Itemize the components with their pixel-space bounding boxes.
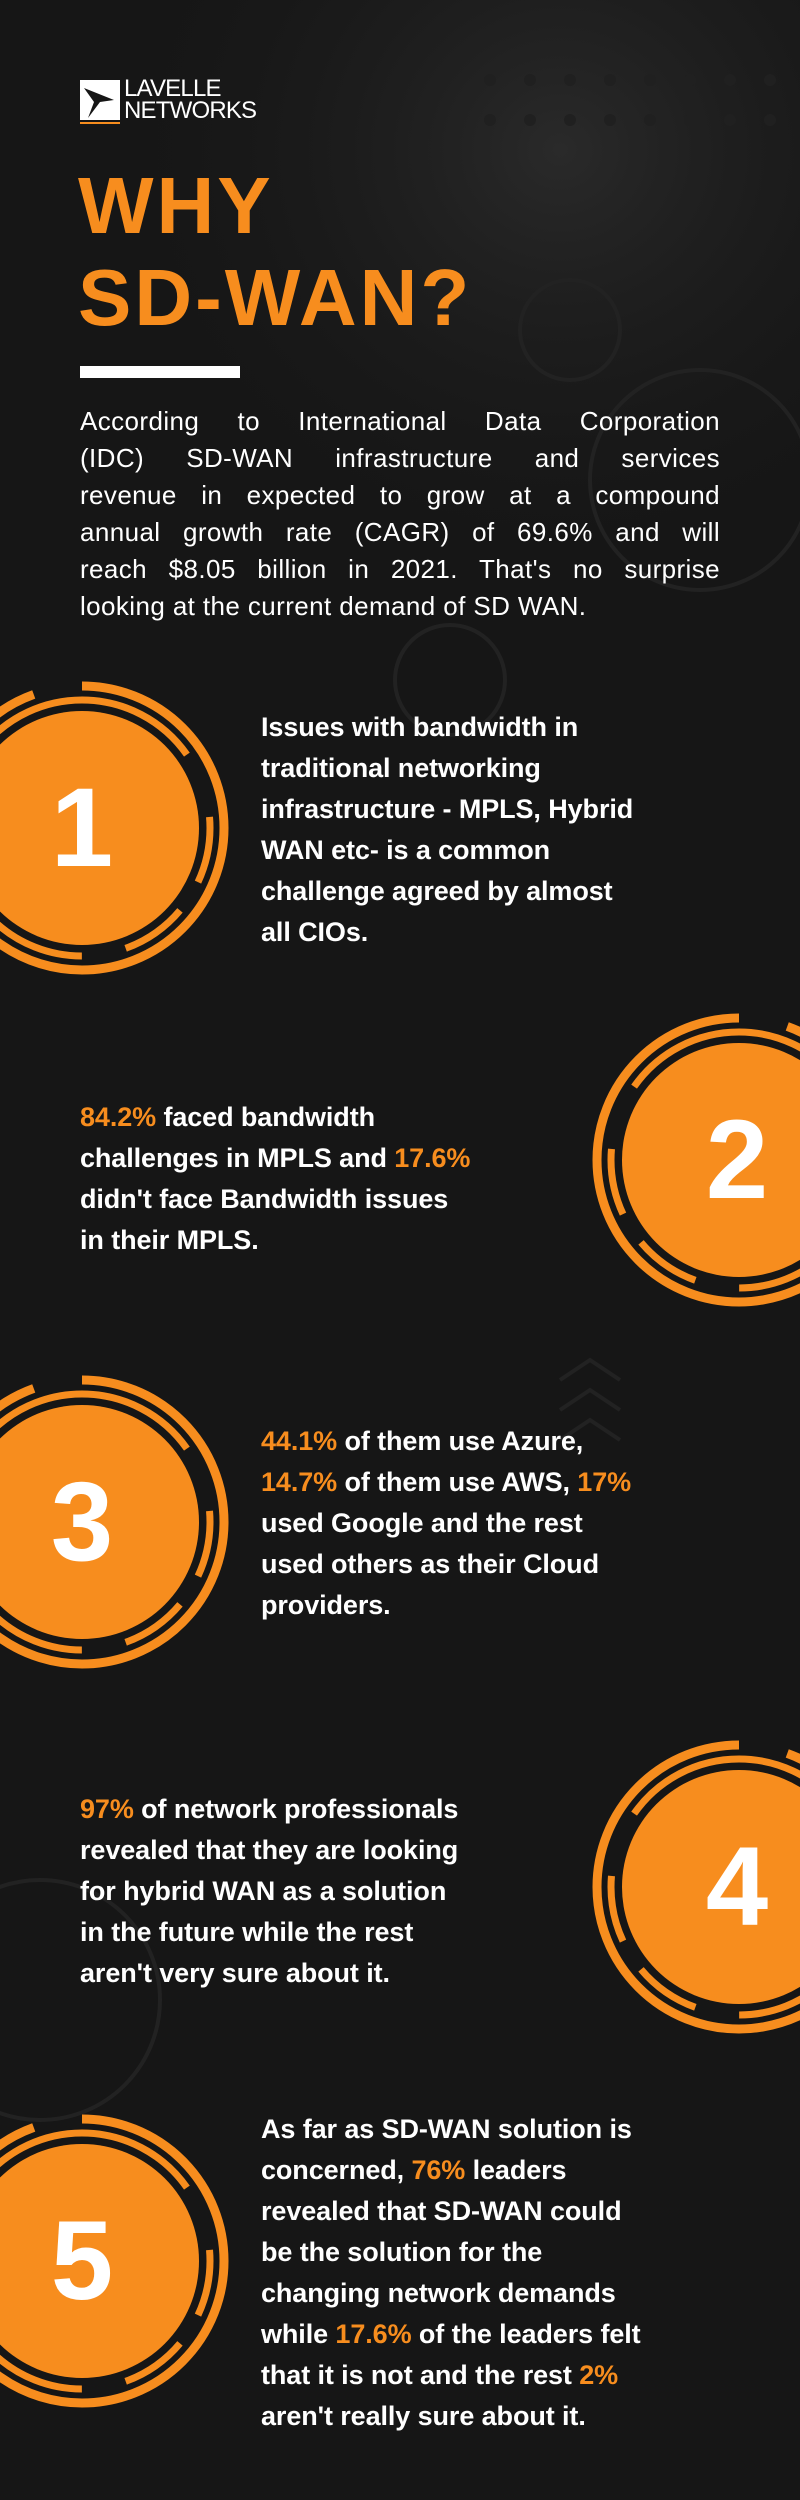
text 4 xyxy=(80,1794,458,1988)
badge 4 xyxy=(592,1740,800,2034)
logo: LAVELLE xyxy=(124,75,221,102)
text 4: revealed that they are looking xyxy=(80,1835,458,1865)
icon: logo mark xyxy=(80,80,120,124)
logo xyxy=(80,75,256,124)
text 3: providers. xyxy=(261,1590,391,1620)
badge 1 xyxy=(0,682,228,974)
logo: NETWORKS xyxy=(124,97,256,124)
number 3: 3 xyxy=(51,1459,113,1584)
title xyxy=(78,161,472,342)
text 5: concerned, 76% leaders xyxy=(261,2155,566,2185)
text 3: 14.7% of them use AWS, 17% xyxy=(261,1467,631,1497)
text 3: used others as their Cloud xyxy=(261,1549,599,1579)
text 1: WAN etc- is a common xyxy=(261,835,550,865)
text 2: didn't face Bandwidth issues xyxy=(80,1184,448,1214)
intro paragraph xyxy=(80,406,720,621)
text 4: for hybrid WAN as a solution xyxy=(80,1876,446,1906)
intro paragraph: (IDC) SD-WAN infrastructure and services xyxy=(80,443,720,473)
number 1: 1 xyxy=(51,765,113,890)
text 2: challenges in MPLS and 17.6% xyxy=(80,1143,470,1173)
text 5: As far as SD-WAN solution is xyxy=(261,2114,632,2144)
text 2: in their MPLS. xyxy=(80,1225,259,1255)
title: SD-WAN? xyxy=(78,253,472,342)
badge 3 xyxy=(0,1376,228,1668)
intro paragraph: revenue in expected to grow at a compound xyxy=(80,480,720,510)
text 1: traditional networking xyxy=(261,753,541,783)
text 5: that it is not and the rest 2% xyxy=(261,2360,618,2390)
text 1: all CIOs. xyxy=(261,917,368,947)
text 5: revealed that SD-WAN could xyxy=(261,2196,621,2226)
text 2 xyxy=(80,1102,470,1255)
number 4: 4 xyxy=(706,1824,768,1949)
text 5: be the solution for the xyxy=(261,2237,542,2267)
text 4: 97% of network professionals xyxy=(80,1794,458,1824)
text 3 xyxy=(261,1426,631,1620)
text 1 xyxy=(261,712,633,947)
text 5: aren't really sure about it. xyxy=(261,2401,586,2431)
intro paragraph: According to International Data Corporation xyxy=(80,406,720,436)
intro paragraph: reach $8.05 billion in 2021. That's no surprise xyxy=(80,554,720,584)
text 1: Issues with bandwidth in xyxy=(261,712,578,742)
text 3: used Google and the rest xyxy=(261,1508,583,1538)
text 5 xyxy=(260,2114,641,2431)
text 4: in the future while the rest xyxy=(80,1917,413,1947)
badge 5 xyxy=(0,2114,228,2408)
text 5: changing network demands xyxy=(261,2278,616,2308)
intro paragraph: annual growth rate (CAGR) of 69.6% and will xyxy=(80,517,720,547)
number 5: 5 xyxy=(51,2198,113,2323)
text 1: infrastructure - MPLS, Hybrid xyxy=(261,794,633,824)
text 4: aren't very sure about it. xyxy=(80,1958,390,1988)
divider bar xyxy=(80,366,240,378)
title: WHY xyxy=(78,161,274,250)
text 5: while 17.6% of the leaders felt xyxy=(261,2319,641,2349)
intro paragraph: looking at the current demand of SD WAN. xyxy=(80,591,586,621)
text 1: challenge agreed by almost xyxy=(261,876,613,906)
text 3: 44.1% of them use Azure, xyxy=(261,1426,583,1456)
number 2: 2 xyxy=(706,1097,768,1222)
text 2: 84.2% faced bandwidth xyxy=(80,1102,375,1132)
badge 2 xyxy=(592,1014,800,1306)
